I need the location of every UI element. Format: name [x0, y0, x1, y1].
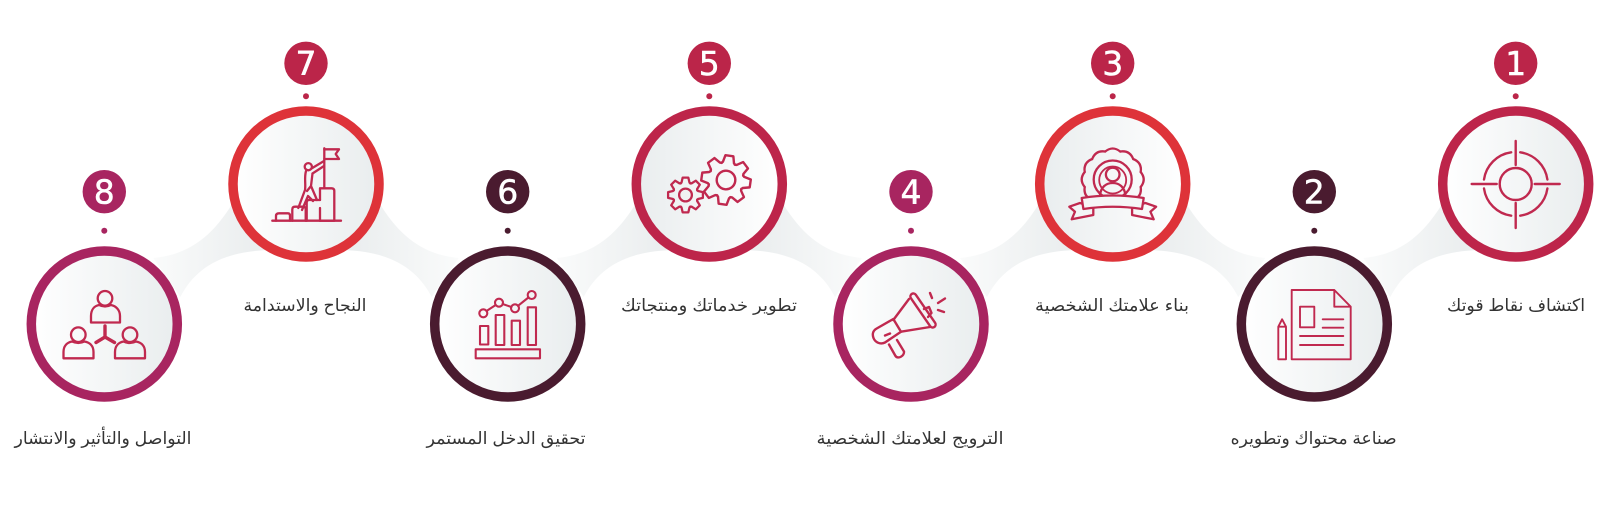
dot 1	[1513, 93, 1519, 99]
dot 5	[706, 93, 712, 99]
badge 6: 6	[497, 172, 518, 211]
step 7	[233, 42, 379, 316]
dot 7	[303, 93, 309, 99]
badge 7: 7	[296, 44, 316, 83]
badge 7	[284, 42, 328, 85]
step 4	[816, 170, 1004, 449]
badge 6	[486, 170, 529, 213]
icon: connected people	[64, 291, 145, 358]
badge 5: 5	[699, 44, 720, 83]
label 8: التواصل والتأثير والانتشار	[13, 426, 192, 448]
icon: growth chart	[476, 291, 540, 358]
badge 2: 2	[1304, 172, 1325, 211]
circle 6	[435, 251, 581, 397]
label 7: النجاح والاستدامة	[244, 296, 366, 316]
label 3: بناء علامتك الشخصية	[1035, 296, 1189, 315]
connector bands between circles	[153, 203, 1484, 297]
icon: climber with flag on steps	[272, 148, 341, 221]
circle 3	[1040, 111, 1186, 257]
dot 6	[505, 228, 511, 234]
circle 4	[838, 251, 984, 397]
badge 1: 1	[1505, 44, 1526, 83]
dot 4	[908, 228, 914, 234]
icon: target	[1472, 141, 1560, 228]
step 2	[1231, 170, 1397, 448]
icon: badge with person and ribbon	[1069, 148, 1156, 219]
badge 4: 4	[900, 172, 922, 211]
label 1: اكتشاف نقاط قوتك	[1447, 296, 1585, 315]
icon: document and pencil	[1278, 290, 1351, 359]
icon: megaphone	[873, 292, 945, 357]
label 5: تطوير خدماتك ومنتجاتك	[621, 296, 797, 315]
badge 5	[688, 42, 731, 85]
dot 3	[1110, 93, 1116, 99]
label 2: صناعة محتواك وتطويره	[1231, 429, 1397, 448]
circle 7	[233, 111, 379, 257]
step 3	[1035, 42, 1189, 315]
circle 1	[1443, 111, 1589, 257]
badge 3	[1091, 42, 1134, 85]
badge 3: 3	[1102, 44, 1123, 83]
circle 2	[1241, 251, 1387, 397]
badge 8	[83, 170, 126, 213]
badge 1	[1494, 42, 1537, 85]
badge 2	[1293, 170, 1336, 213]
dot 2	[1311, 228, 1317, 234]
badge 8: 8	[94, 172, 115, 211]
circle 5	[636, 111, 782, 257]
dot 8	[101, 228, 107, 234]
step 5	[621, 42, 797, 315]
label 4: الترويج لعلامتك الشخصية	[816, 429, 1004, 449]
badge 4	[889, 170, 933, 213]
icon: gears	[668, 152, 754, 212]
step 6	[425, 170, 586, 448]
step 1	[1443, 42, 1589, 315]
label 6: تحقيق الدخل المستمر	[425, 429, 586, 448]
circle 8	[31, 251, 177, 397]
step 8	[13, 170, 192, 448]
